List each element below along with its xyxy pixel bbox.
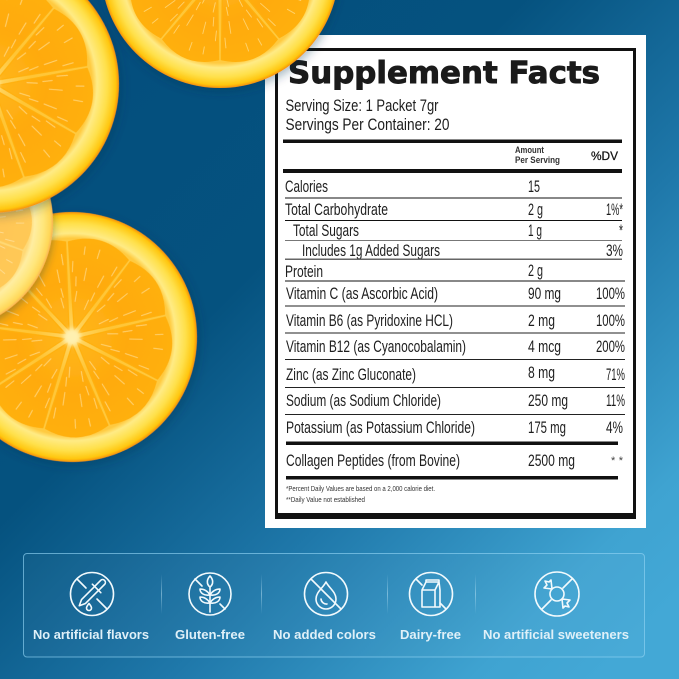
row: total sugars: * (619, 222, 623, 240)
row: vitamin c: Vitamin C (as Ascorbic Acid) (286, 285, 438, 303)
table header: Amount (515, 145, 544, 155)
footnotes: **Daily Value not established (286, 497, 365, 504)
row: protein: 2 g (528, 262, 543, 280)
row: sodium: Sodium (as Sodium Chloride) (286, 392, 441, 410)
label: no added colors: No added colors (273, 627, 376, 642)
row: collagen peptides: 2500 mg (528, 452, 575, 470)
label: dairy-free: Dairy-free (400, 627, 461, 642)
row: potassium: Potassium (as Potassium Chloride) (286, 419, 475, 437)
row: total carbohydrate: 1%* (606, 201, 623, 219)
row: protein (285, 262, 625, 282)
row: vitamin c: 90 mg (528, 285, 561, 303)
row: total carbohydrate (285, 201, 623, 221)
row: vitamin c (285, 285, 625, 306)
label: gluten-free: Gluten-free (175, 627, 245, 642)
row: added sugars: Includes 1g Added Sugars (302, 242, 440, 260)
row: total sugars (285, 222, 623, 241)
table header: %DV (591, 149, 618, 163)
row: potassium: 175 mg (528, 419, 566, 437)
serving info: Servings Per Container: 20 (286, 116, 450, 134)
footnotes: *Percent Daily Values are based on a 2,000 calorie diet. (286, 486, 435, 493)
row: vitamin b12: 4 mcg (528, 338, 561, 356)
row: total sugars: 1 g (528, 222, 542, 240)
row: vitamin b12: 200% (596, 338, 625, 356)
row: zinc (285, 364, 625, 388)
row: potassium (286, 419, 623, 445)
row: added sugars: 3% (606, 242, 623, 260)
row: potassium: 4% (606, 419, 623, 437)
row: vitamin b12: Vitamin B12 (as Cyanocobalamin) (286, 338, 466, 356)
title: Supplement Facts (288, 56, 600, 91)
row: total carbohydrate: Total Carbohydrate (285, 201, 388, 219)
card bottom frame bar (275, 513, 636, 519)
row: total carbohydrate: 2 g (528, 201, 543, 219)
label: no artificial flavors: No artificial flavors (33, 627, 149, 642)
row: total sugars: Total Sugars (293, 222, 359, 240)
row: added sugars (285, 242, 623, 260)
row: vitamin c: 100% (596, 285, 625, 303)
orange slice: lower (0, 173, 236, 501)
orange slice: top (101, 0, 339, 88)
row: sodium (285, 392, 625, 415)
orange slice: pale translucent (0, 97, 70, 347)
row: zinc: Zinc (as Zinc Gluconate) (286, 366, 416, 384)
row: vitamin b6: Vitamin B6 (as Pyridoxine HCL) (286, 312, 453, 330)
orange slice: top left (0, 0, 155, 249)
serving info: Serving Size: 1 Packet 7gr (286, 97, 439, 115)
row: collagen peptides (286, 452, 624, 480)
row: zinc: 71% (606, 366, 625, 384)
card black frame (276, 50, 634, 516)
row: vitamin b6 (285, 312, 625, 334)
serving info (286, 97, 450, 134)
row: calories (285, 178, 622, 198)
row: calories: 15 (528, 178, 540, 196)
panel: free-from badges (24, 554, 644, 657)
row: vitamin b6: 100% (596, 312, 625, 330)
label: no artificial sweeteners: No artificial sweeteners (483, 627, 629, 642)
row: collagen peptides: ** (611, 455, 624, 467)
icon: no colors (304, 572, 348, 616)
icon: no dairy (410, 572, 452, 616)
row: collagen peptides: Collagen Peptides (from Bovine) (286, 452, 460, 470)
panel: supplement facts card (265, 35, 646, 528)
row: zinc: 8 mg (528, 364, 555, 382)
icon: no gluten (189, 573, 231, 615)
row: vitamin b12 (285, 338, 625, 360)
row: sodium: 250 mg (528, 392, 568, 410)
icon: no dropper (70, 572, 114, 616)
row: calories: Calories (285, 178, 328, 196)
table header (283, 140, 622, 173)
row: protein: Protein (285, 263, 323, 281)
table header: Per Serving (515, 155, 560, 165)
row: sodium: 11% (606, 392, 625, 410)
row: vitamin b6: 2 mg (528, 312, 555, 330)
icon: no sweeteners (535, 572, 579, 616)
footnotes (286, 486, 435, 504)
dividers (161, 574, 476, 614)
